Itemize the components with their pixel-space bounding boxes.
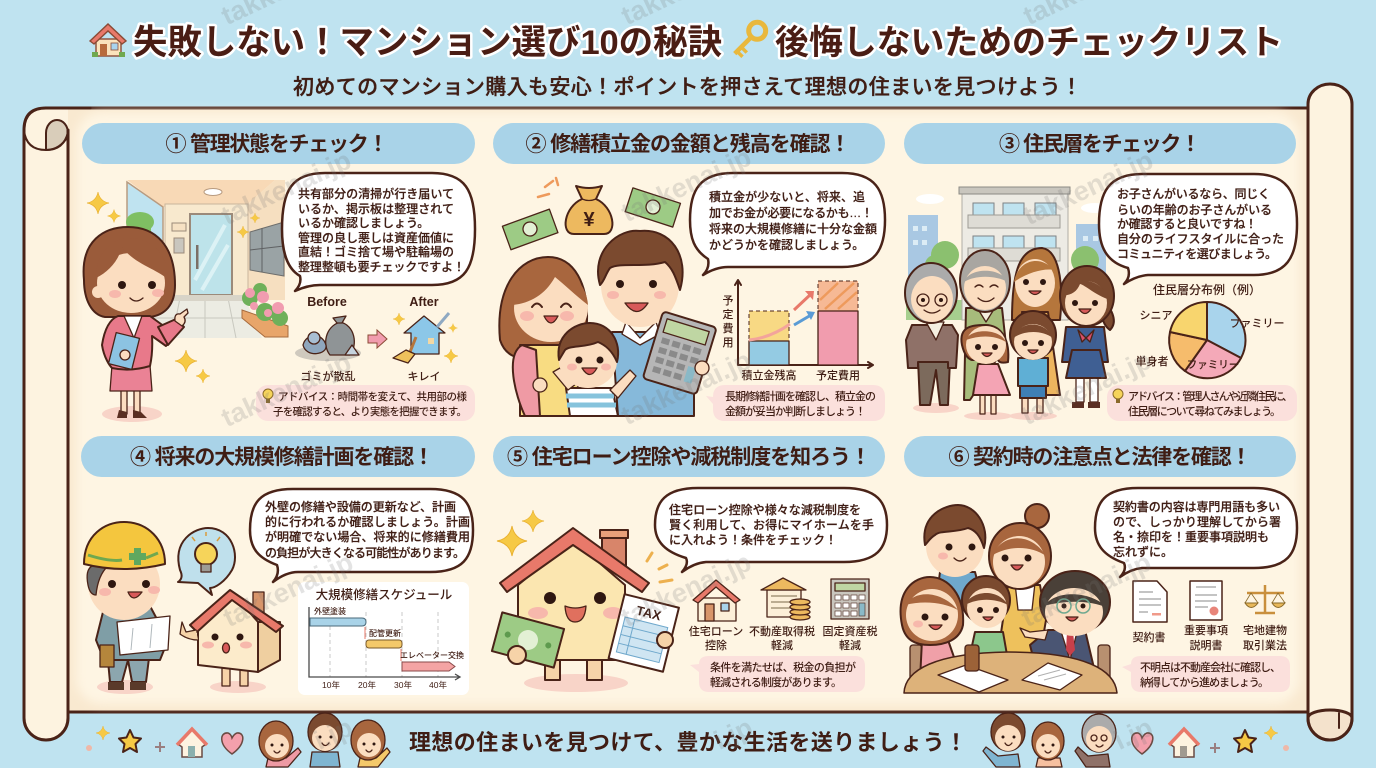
tip box 5: 軽減される制度があります。 — [710, 675, 842, 689]
advice box 3: アドバイス：管理人さんや近隣住民に、 — [1128, 389, 1293, 403]
pie chart: resident distribution — [1136, 282, 1284, 378]
icon: legal scales: 宅地建物 — [1243, 623, 1287, 637]
panel 2: repair reserve — [493, 123, 885, 421]
icon: house — [90, 24, 126, 57]
speech bubble 3: コミュニティを選びましょう。 — [1117, 247, 1277, 261]
documents on table — [938, 645, 1082, 692]
speech bubble 1: いるか、掲示板は整理されて — [298, 201, 454, 216]
sparkles — [87, 192, 260, 383]
grandfather — [905, 263, 959, 413]
boy — [1009, 311, 1057, 420]
illustration: woman in pink suit — [84, 227, 188, 422]
chart: repair schedule: 大規模修繕スケジュール — [316, 587, 452, 602]
child — [962, 576, 1010, 655]
advice box 1: 子を確認すると、より実態を把握できます。 — [273, 405, 467, 418]
footer message: 理想の住まいを見つけて、豊かな生活を送りましょう！ — [409, 730, 967, 755]
icon: loan deduction house: 控除 — [705, 638, 727, 652]
footer left decorations — [86, 726, 243, 757]
illustration: apartment building — [906, 187, 1109, 320]
table — [904, 652, 1117, 693]
watermarks: takkenai.jp — [1017, 345, 1156, 431]
chart: repair schedule: 配管更新 — [369, 628, 401, 638]
bar chart: reserve vs planned cost: 定 — [722, 308, 734, 321]
icon: loan deduction house — [689, 580, 743, 652]
speech bubble 3: お子さんがいるなら、同じく — [1117, 186, 1270, 201]
tip box 6 — [1122, 656, 1290, 692]
heading 3 — [904, 123, 1296, 164]
woman with hair bun — [989, 504, 1051, 655]
pie chart: resident distribution: ファミリー — [1230, 318, 1284, 330]
footer right decorations — [1132, 726, 1289, 757]
heading 6: ⑥ 契約時の注意点と法律を確認！ — [948, 446, 1252, 469]
icon row: legal documents — [1132, 581, 1287, 652]
left scroll roll — [24, 108, 90, 740]
title: 失敗しない！マンション選び10の秘訣 — [133, 24, 722, 62]
heading 2: ② 修繕積立金の金額と残高を確認！ — [526, 132, 850, 156]
pie chart: resident distribution: ファミリー — [1187, 359, 1239, 371]
icon: clean house and broom — [393, 313, 458, 363]
bar chart: reserve vs planned cost: 費 — [722, 321, 734, 335]
panel 1: management condition — [82, 123, 475, 422]
watermarks: takkenai.jp — [617, 345, 756, 431]
speech bubble 4: 外壁の修繕や設備の更新など、計画 — [265, 499, 456, 514]
before and after diagram: Before — [307, 295, 347, 309]
advice box 3: 住民層について尋ねてみましょう。 — [1128, 404, 1281, 418]
pie chart: resident distribution: 住民層分布例（例） — [1153, 282, 1261, 297]
icon: contract: 契約書 — [1132, 630, 1166, 644]
icon: acquisition tax building and coins: 不動産取得税 — [749, 624, 815, 638]
watermarks: i.jp — [709, 712, 757, 756]
illustration: smiling house with tax form — [492, 510, 679, 692]
icon row: tax systems — [689, 578, 878, 652]
icon: light bulb — [263, 389, 273, 403]
icon: property tax calculator: 軽減 — [839, 638, 861, 652]
speech bubble 6: ので、しっかり理解してから署 — [1113, 514, 1281, 529]
icon: loan deduction house: 住宅ローン — [689, 624, 743, 638]
icon: acquisition tax building and coins — [749, 578, 815, 652]
footer left people — [259, 713, 390, 767]
watermarks: i.jp — [309, 712, 357, 756]
watermarks: takkenai.jp — [1019, 145, 1158, 231]
agent with glasses — [1020, 571, 1110, 685]
footer right people — [983, 713, 1116, 767]
tip box 6: 不明点は不動産会社に確認し、 — [1140, 660, 1281, 674]
heading 3: ③ 住民層をチェック！ — [999, 133, 1201, 156]
speech bubble 3: らいの年齢のお子さんがいる — [1117, 202, 1272, 217]
speech bubble 4 — [250, 489, 473, 582]
illustration: house character — [180, 590, 283, 693]
speech bubble 1: 整理整頓も要チェックですよ！ — [298, 259, 465, 274]
calculator — [643, 311, 717, 395]
school girl — [1060, 266, 1114, 408]
heading 6 — [904, 436, 1296, 477]
icon: contract — [1132, 581, 1167, 644]
speech bubble 2: 加でお金が必要になるかも…！ — [709, 205, 873, 220]
icon: money: ¥ — [583, 209, 595, 231]
advice box 1: アドバイス：時間帯を変えて、共用部の様 — [278, 390, 468, 403]
speech bubble 2 — [690, 173, 885, 275]
speech bubble 6: 契約書の内容は専門用語も多い — [1113, 499, 1280, 514]
bar chart: reserve vs planned cost: 用 — [722, 337, 734, 349]
advice box 3 — [1107, 385, 1297, 421]
panel 5: tax deductions — [492, 436, 887, 692]
speech bubble 3 — [1099, 174, 1297, 284]
heading 5: ⑤ 住宅ローン控除や減税制度を知ろう！ — [507, 445, 871, 469]
before and after diagram — [295, 295, 458, 383]
speech bubble 1: 共有部分の清掃が行き届いて — [298, 186, 454, 201]
arrow: before to after — [368, 330, 387, 348]
speech bubble 5: 住宅ローン控除や様々な減税制度を — [669, 502, 861, 517]
speech bubble 6 — [1095, 488, 1297, 577]
speech bubble 6: 名・捺印を！重要事項説明も — [1113, 529, 1269, 544]
icon: property tax calculator: 固定資産税 — [822, 624, 878, 638]
icon: legal scales — [1243, 585, 1287, 652]
bar chart: reserve vs planned cost: 予定費用 — [816, 368, 860, 382]
speech bubble 4: 的に行われるか確認しましょう。計画 — [265, 514, 470, 529]
grandmother — [960, 250, 1010, 400]
mother — [1012, 248, 1061, 395]
before and after diagram: ゴミが散乱 — [300, 369, 356, 383]
watermarks: takkenai.jp — [217, 347, 356, 433]
tip box 5: 条件を満たせば、税金の負担が — [710, 660, 856, 674]
icon: key — [729, 19, 769, 59]
watermarks: i.jp — [1109, 712, 1157, 756]
icon: property tax calculator — [822, 579, 878, 652]
small girl — [961, 325, 1012, 420]
speech bubble 5 — [655, 488, 887, 572]
heading 1: ① 管理状態をチェック！ — [166, 133, 388, 156]
speech bubble 1: 直結！ゴミ捨て場や駐輪場の — [298, 244, 454, 259]
hand holding calculator — [695, 361, 709, 375]
child — [553, 323, 636, 416]
chart: repair schedule — [298, 582, 469, 695]
watermarks: takkenai.jp — [617, 547, 756, 633]
bar chart: reserve vs planned cost: 予 — [722, 294, 734, 307]
panel 3: residents — [904, 123, 1297, 421]
woman — [499, 257, 588, 416]
chart: repair schedule: エレベーター交換 — [400, 650, 464, 660]
speech bubble 2: 積立金が少ないと、将来、追 — [709, 189, 865, 204]
footer banner — [86, 713, 1289, 767]
speech bubble 5: に入れよう！条件をチェック！ — [669, 532, 837, 547]
speech bubble 1 — [282, 173, 475, 291]
watermarks: takkenai.jp — [617, 142, 756, 228]
icon: important matters explanation — [1184, 581, 1228, 652]
bar chart: reserve vs planned cost: 積立金残高 — [742, 368, 796, 382]
tip box 2 — [706, 385, 885, 421]
heading 5 — [493, 436, 885, 477]
speech bubble 1: いるか確認しましょう。 — [298, 215, 429, 230]
tax document: TAX — [635, 603, 663, 623]
advice box 1 — [256, 385, 475, 421]
speech bubble 3: 自分のライフスタイルに合った — [1117, 231, 1284, 246]
before and after diagram: キレイ — [408, 371, 440, 383]
illustration: entrance — [126, 180, 288, 338]
tax document — [609, 594, 679, 672]
tip box 6: 納得してから進めましょう。 — [1140, 675, 1269, 689]
watermarks — [217, 0, 1158, 756]
chart: repair schedule: 外壁塗装 — [314, 606, 346, 616]
icon: important matters explanation: 説明書 — [1190, 638, 1222, 652]
pie chart: resident distribution: シニア — [1140, 309, 1172, 322]
thought bubble with light bulb — [178, 528, 235, 595]
title: 後悔しないためのチェックリスト — [775, 24, 1283, 62]
man at back — [924, 505, 985, 610]
speech bubble 2: かどうかを確認しましょう。 — [709, 237, 864, 252]
watermarks: takkenai.jp — [217, 145, 356, 231]
icon: light bulb — [1113, 389, 1123, 403]
icon: money — [502, 178, 680, 250]
illustration: residents group — [905, 248, 1114, 420]
chart: repair schedule: 10年 — [322, 680, 340, 690]
heading 4: ④ 将来の大規模修繕計画を確認！ — [130, 446, 434, 469]
illustration: family — [499, 231, 717, 416]
bar chart: reserve vs planned cost — [722, 280, 873, 382]
chairs — [910, 645, 1110, 680]
icon: acquisition tax building and coins: 軽減 — [771, 638, 793, 652]
right scroll roll — [1308, 84, 1352, 740]
heading 1 — [82, 123, 475, 164]
subtitle: 初めてのマンション購入も安心！ポイントを押さえて理想の住まいを見つけよう！ — [293, 76, 1082, 99]
title — [90, 19, 1283, 62]
speech bubble 2: 将来の大規模修繕に十分な金額 — [709, 221, 877, 236]
man — [598, 231, 694, 416]
before and after diagram: After — [409, 295, 439, 309]
speech bubble 1: 管理の良し悪しは資産価値に — [298, 230, 454, 245]
speech bubble 3: か確認すると良いですね！ — [1117, 216, 1257, 231]
illustration: family at contract table — [901, 504, 1117, 693]
bill — [492, 612, 564, 668]
chart: repair schedule: 20年 — [358, 680, 376, 690]
tip box 2: 長期修繕計画を確認し、積立金の — [725, 389, 876, 403]
heading 2 — [493, 123, 885, 164]
chart: repair schedule: 30年 — [394, 680, 412, 690]
watermarks: takkenai.jp — [1017, 547, 1156, 633]
speech bubble 6: 忘れずに。 — [1113, 545, 1173, 559]
seated woman — [901, 577, 963, 680]
chart: repair schedule: 40年 — [429, 680, 447, 690]
icon: important matters explanation: 重要事項 — [1184, 623, 1228, 637]
panel 6: contract and law — [901, 436, 1297, 693]
illustration: construction worker — [84, 522, 170, 694]
speech bubble 4: が明確でない場合、将来的に修繕費用 — [265, 529, 470, 544]
panel 4: large-scale repair plan — [81, 436, 475, 695]
speech bubble 5: 賢く利用して、お得にマイホームを手 — [669, 517, 874, 532]
tip box 5 — [690, 656, 865, 692]
heading 4 — [81, 436, 475, 477]
pie chart: resident distribution: 単身者 — [1136, 354, 1168, 368]
tip box 2: 金額が妥当か判断しましょう！ — [725, 404, 866, 418]
watermarks: takkenai.jp — [219, 547, 358, 633]
speech bubble 4: の負担が大きくなる可能性があります。 — [265, 545, 465, 560]
icon: legal scales: 取引業法 — [1243, 638, 1287, 652]
icon: garbage bags — [295, 316, 361, 361]
